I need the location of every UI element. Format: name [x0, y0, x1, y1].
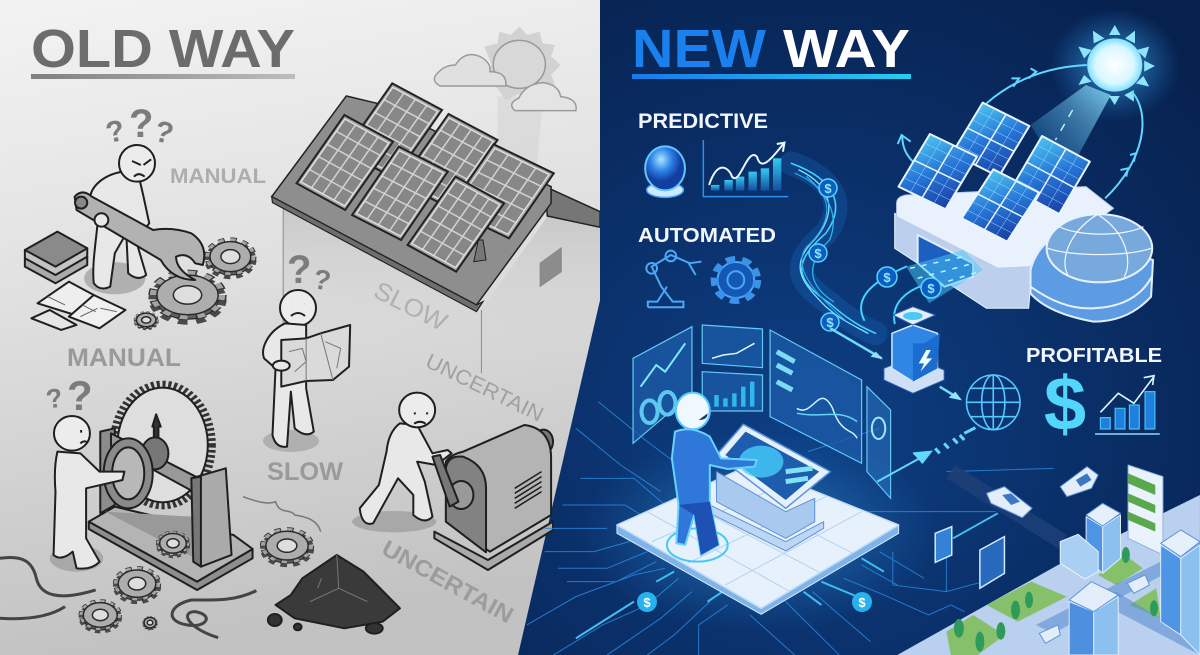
question marks: ?	[129, 102, 153, 146]
icon: growth bar chart	[1095, 376, 1160, 434]
label: manual (lower): MANUAL	[67, 344, 181, 372]
icon: globe	[966, 375, 1020, 430]
question marks: ?	[151, 115, 177, 151]
figure: angry man with wrench, gears, books	[25, 145, 252, 330]
battery storage unit	[830, 307, 962, 400]
icon: crystal ball and forecast chart	[645, 140, 788, 197]
energy stream ribbons	[791, 163, 929, 333]
house with roof and dirty solar panels	[272, 83, 600, 373]
question marks	[44, 102, 333, 419]
title: new way: WAY	[783, 19, 910, 79]
label: uncertain on ground: UNCERTAIN	[378, 535, 518, 628]
icon: sun and clouds, grey	[434, 27, 576, 173]
smart city with cars and buildings	[897, 465, 1200, 655]
figure: happy man at console	[667, 393, 757, 562]
figure: man turning gear machine	[50, 384, 253, 590]
panel: old way background	[0, 0, 600, 655]
coins on circuit traces	[637, 592, 872, 612]
glowing circuit highlights	[576, 513, 998, 638]
label: manual (upper): MANUAL	[170, 165, 266, 188]
panel: new way background	[518, 0, 1200, 655]
coins on circuit traces: $	[858, 595, 866, 610]
devices: phone and tablet	[935, 527, 1004, 588]
label: uncertain on wall: UNCERTAIN	[422, 350, 547, 427]
coins with dollar signs: $	[883, 270, 891, 285]
question marks: ?	[103, 114, 128, 150]
coins with dollar signs: $	[927, 281, 935, 296]
question marks: ?	[67, 372, 93, 419]
figure: worried man reading map	[263, 290, 350, 452]
arrow to globe	[877, 428, 975, 482]
energy beam leaving building door	[906, 250, 983, 303]
circuit board traces	[527, 402, 1054, 655]
coins with dollar signs: $	[814, 246, 822, 261]
label: predictive: PREDICTIVE	[638, 110, 768, 133]
platform with console	[580, 424, 937, 632]
coins with dollar signs: $	[826, 315, 834, 330]
label: slow (lower): SLOW	[267, 458, 343, 486]
title: old way: OLD WAY	[31, 19, 295, 79]
coins with dollar signs: $	[824, 181, 832, 196]
figure: man cranking old generator	[352, 393, 553, 570]
question marks: ?	[287, 248, 311, 292]
debris: gears, wires, coal pile	[0, 497, 400, 638]
label: slow on wall: SLOW	[369, 276, 452, 337]
holographic dashboard screens	[633, 325, 891, 498]
icon: dollar sign: $	[1044, 362, 1086, 447]
solar building with dome and blue panels	[895, 103, 1153, 322]
title: new way	[632, 19, 911, 79]
coins with dollar signs	[809, 179, 941, 331]
label: profitable: PROFITABLE	[1026, 345, 1162, 367]
coins on circuit traces: $	[643, 595, 651, 610]
question marks: ?	[311, 263, 333, 297]
question marks: ?	[44, 382, 65, 415]
sun with beam and orbit arrows	[898, 8, 1180, 198]
icon: robot arm and gear	[646, 251, 757, 307]
label: automated: AUTOMATED	[638, 225, 776, 247]
title: new way: NEW	[632, 19, 766, 79]
